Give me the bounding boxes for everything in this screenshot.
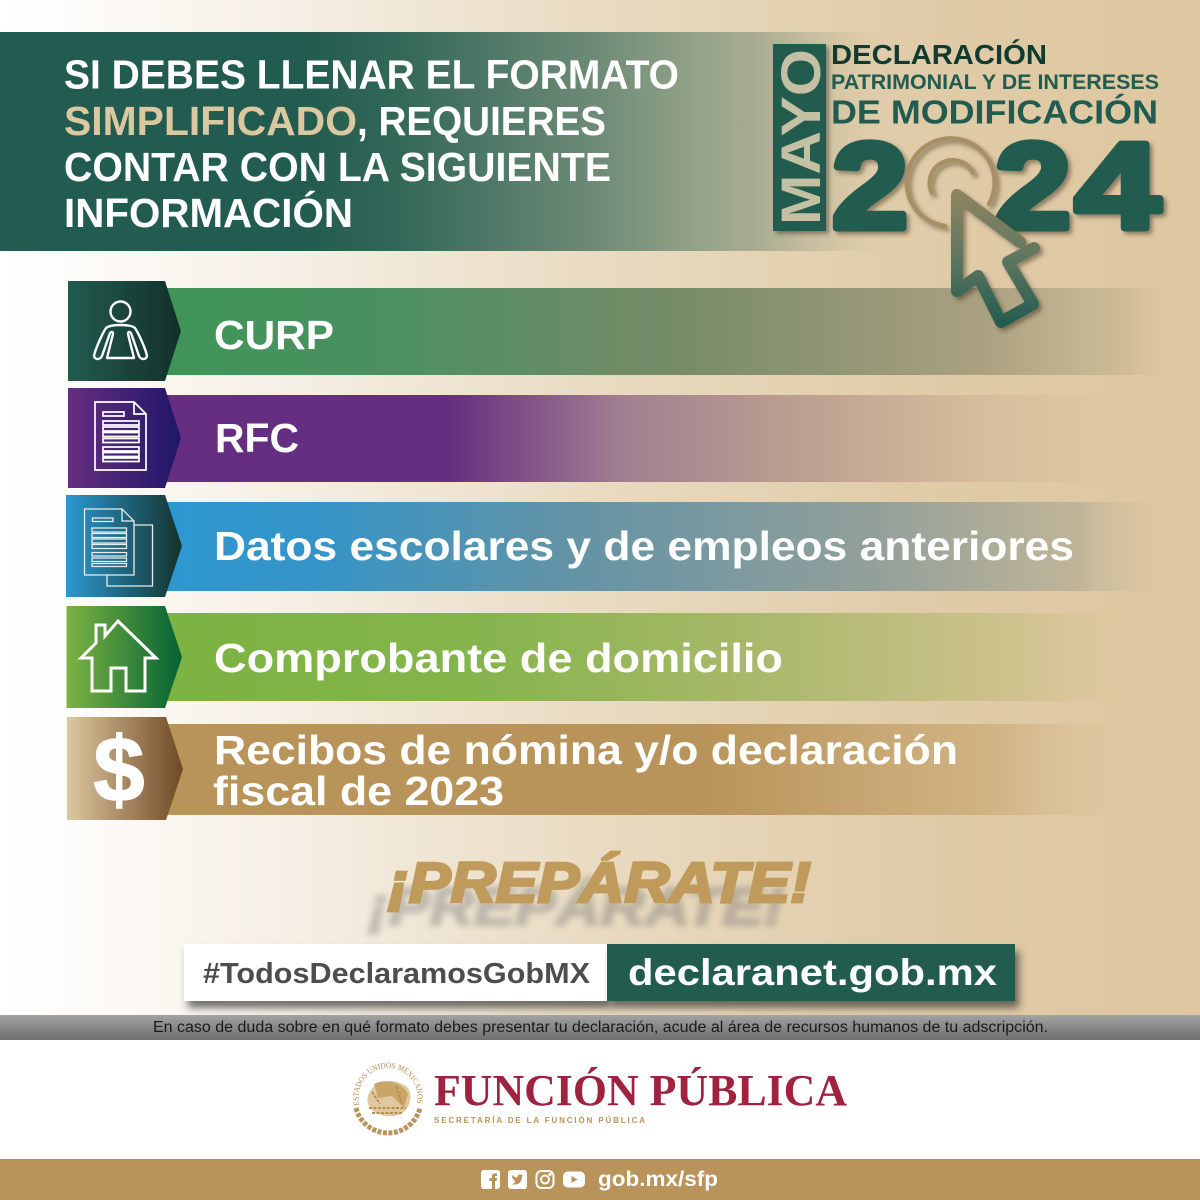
label: Datos escolares: Datos escolares y de empleos anteriores xyxy=(214,523,1074,569)
label: Comprobante: Comprobante de domicilio xyxy=(214,635,783,681)
header band xyxy=(0,32,890,251)
hashtag box: #TodosDeclaramosGobMX xyxy=(203,958,591,990)
hashtag box xyxy=(184,944,607,1001)
row: Recibos xyxy=(67,717,1150,821)
seal: ESTADOS UNIDOS MEXICANOS xyxy=(353,1062,423,1106)
click rings xyxy=(907,138,995,226)
logo headings xyxy=(831,39,1159,130)
icon: youtube xyxy=(563,1172,585,1188)
tab: Comprobante xyxy=(66,606,182,708)
label: Recibos xyxy=(213,727,958,814)
icon: dollar sign: $ xyxy=(93,719,145,821)
row: Comprobante xyxy=(66,606,1165,708)
footer gold bar xyxy=(0,1159,1200,1200)
footer URL: gob.mx/sfp xyxy=(598,1168,718,1191)
header title xyxy=(64,52,679,236)
year 2024 xyxy=(832,118,1160,254)
footer white panel xyxy=(0,1040,1200,1159)
header title: CONTAR CON LA SIGUIENTE xyxy=(64,144,611,190)
label: Recibos: Recibos de nómina y/o declaración xyxy=(214,727,958,773)
logo: declaración 2024 xyxy=(769,39,1160,322)
header title: , REQUIERES xyxy=(357,98,606,144)
note band xyxy=(0,1015,1200,1040)
tab: Datos escolares xyxy=(66,495,182,597)
icon: document xyxy=(95,402,146,470)
call to action: ¡PREPÁRATE! xyxy=(388,851,811,915)
Función Pública wordmark: FUNCIÓN PÚBLICA xyxy=(434,1066,847,1115)
row: Datos escolares xyxy=(66,495,1180,597)
logo headings: DE MODIFICACIÓN xyxy=(831,94,1158,130)
label: RFC: RFC xyxy=(215,415,299,461)
icon: person xyxy=(94,302,147,359)
call to action: ¡PREPÁRATE! xyxy=(368,877,784,937)
header title: SI DEBES LLENAR EL FORMATO xyxy=(64,52,679,98)
note band: En caso de duda sobre en qué formato debes presentar tu declaración, acude al área de recursos humanos de tu adscripción. xyxy=(153,1019,1048,1036)
year 2024: 2 xyxy=(995,118,1071,254)
row: RFC xyxy=(68,388,1180,488)
year 2024: 2 xyxy=(832,118,908,254)
Función Pública wordmark: SECRETARÍA DE LA FUNCIÓN PÚBLICA xyxy=(434,1116,645,1125)
website box: declaranet.gob.mx xyxy=(628,952,997,993)
label: Recibos: fiscal de 2023 xyxy=(213,768,504,814)
icon: house xyxy=(81,621,156,691)
tab: CURP xyxy=(68,281,181,381)
icon: documents xyxy=(84,509,152,586)
icon: twitter xyxy=(508,1170,527,1189)
tab: RFC xyxy=(68,388,181,488)
MAYO vertical tag: MAYO xyxy=(769,49,832,225)
logo headings: DECLARACIÓN xyxy=(831,39,1047,70)
label: CURP: CURP xyxy=(214,312,334,358)
row: CURP xyxy=(68,281,1180,381)
header title: SIMPLIFICADO xyxy=(64,98,357,144)
tab: Recibos xyxy=(67,717,183,820)
logo headings: PATRIMONIAL Y DE INTERESES xyxy=(831,71,1159,94)
seal xyxy=(353,1062,423,1136)
icon: instagram xyxy=(536,1171,554,1188)
icon: facebook xyxy=(481,1170,500,1189)
cursor arrow xyxy=(957,195,1034,322)
website box xyxy=(607,944,1015,1001)
year 2024: 4 xyxy=(1075,118,1160,254)
header title: INFORMACIÓN xyxy=(64,190,353,236)
call to action xyxy=(368,851,811,937)
